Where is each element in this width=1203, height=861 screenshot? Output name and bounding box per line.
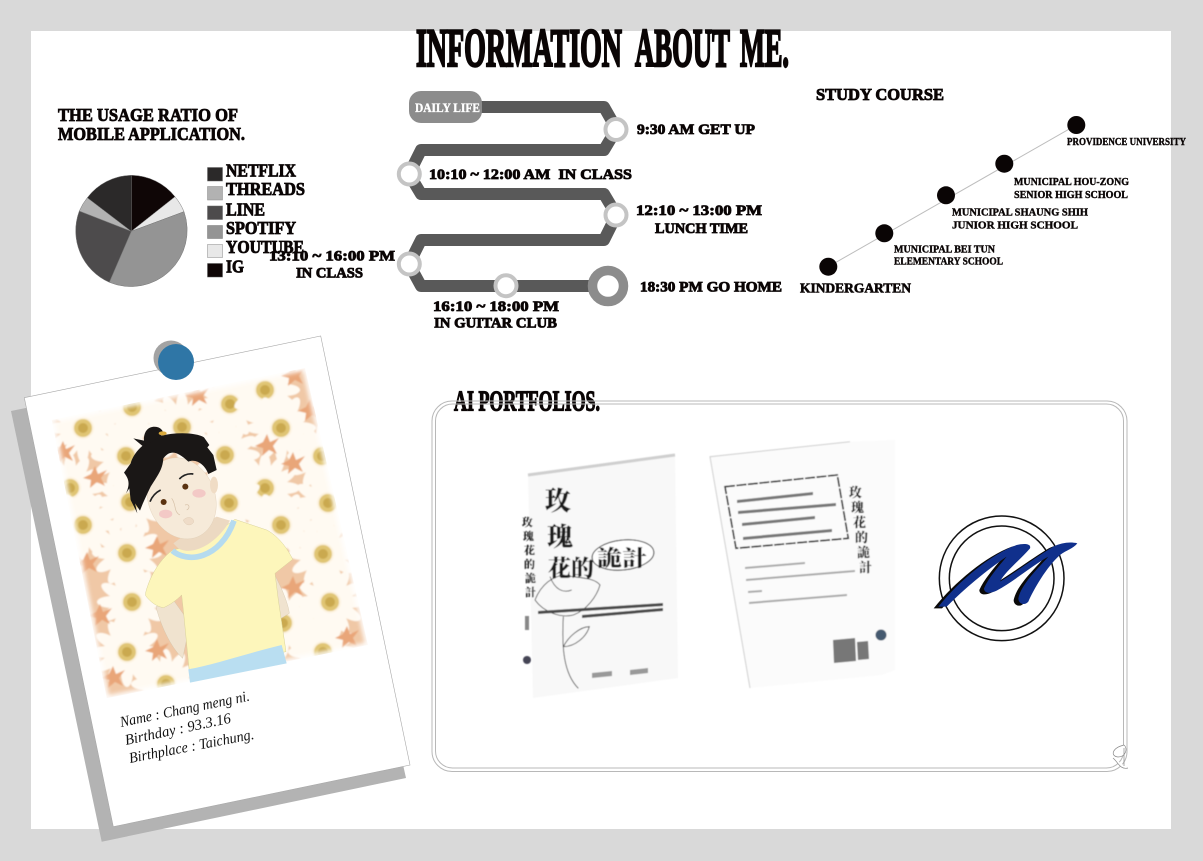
double rounded frame [432,401,1127,772]
timeline track [409,107,616,286]
badge: daily life [409,91,482,123]
card caption [118,689,255,767]
back spine title: 計 [859,557,872,576]
timeline stops [399,119,626,296]
legend: LINE [226,200,265,220]
card caption: Name : Chang meng ni. [118,689,251,731]
spine title: 的 [524,556,535,572]
spine title: 計 [525,584,536,600]
book front cover: 詭計 [597,542,647,573]
heading: study course: STUDY COURSE [816,85,944,104]
timeline labels: IN GUITAR CLUB [434,316,557,332]
pie chart [76,175,187,287]
panel: study course [800,85,1186,296]
heading: usage ratio: THE USAGE RATIO OF [58,105,238,125]
rose line drawing [535,575,600,688]
hair [124,433,217,513]
publisher logo [876,630,886,640]
timeline labels [269,122,782,332]
cover title badge [591,537,655,573]
panel: pinned photo card [11,336,410,842]
back spine title: 的 [855,527,868,546]
arms [156,600,190,658]
book front cover: 瑰 [547,517,574,554]
back cover quote lines [737,492,836,540]
cover blurb [523,603,663,678]
legend: SPOTIFY [226,218,296,238]
M blue stroke [938,543,1077,607]
QR codes [833,638,869,663]
timeline labels: 12:10 ~ 13:00 PM [636,203,762,219]
heading: AI portfolios: AI PORTFOLIOS. [454,386,600,418]
course labels: MUNICIPAL BEI TUN [894,245,995,256]
eyes and brows [161,499,167,505]
text: ME. [740,18,789,78]
course labels: JUNIOR HIGH SCHOOL [952,221,1078,232]
blush [159,510,172,518]
neck [173,517,230,551]
collar [172,521,234,557]
back spine title: 花 [853,512,866,531]
ear [210,477,218,493]
logo: M emblem [934,516,1077,641]
panel: mobile application usage [58,105,305,287]
timeline labels: 18:30 PM GO HOME [640,280,782,296]
book front cover [522,455,678,698]
course labels: KINDERGARTEN [800,281,911,296]
course labels [800,137,1186,296]
spine title: 瑰 [523,528,535,544]
shirt hem [188,645,287,683]
book back cover [710,440,895,688]
timeline labels: LUNCH TIME [655,221,748,237]
timeline labels: 16:10 ~ 18:00 PM [433,299,559,315]
spine title: 詭 [525,570,536,586]
card shadow [11,350,406,842]
back spine title: 瑰 [851,497,865,516]
timeline labels: 13:10 ~ 16:00 PM [269,248,395,264]
back cover body lines [745,562,855,604]
photo background: daisies [52,368,368,698]
timeline labels: IN CLASS [296,266,363,282]
cover title: 玫 [545,481,571,518]
timeline labels: 9:30 AM GET UP [637,122,755,138]
badge: daily life: DAILY LIFE [415,101,480,115]
face [135,447,228,549]
timeline labels: 10:10 ~ 12:00 AM IN CLASS [429,167,632,183]
course labels: MUNICIPAL HOU-ZONG [1014,177,1129,188]
hair bun [133,427,163,447]
frame corner ornament [1113,745,1128,768]
M shadow [934,544,1073,608]
course labels: SENIOR HIGH SCHOOL [1014,190,1128,201]
course stops [819,116,1085,276]
panel: daily life timeline [269,91,782,332]
title: ABOUT [635,18,730,78]
spine title: 花 [524,542,535,558]
legend: IG [226,256,244,276]
course line [828,125,1076,267]
course labels: ELEMENTARY SCHOOL [894,257,1003,268]
card caption: Birthday : 93.3.16 [124,711,233,749]
course labels: PROVIDENCE UNIVERSITY [1067,137,1186,148]
back spine title [849,482,872,576]
portrait illustration [124,427,293,683]
book front cover: 花的 [548,550,594,583]
legend: YOUTUBE [226,237,304,257]
legend: THREADS [226,179,305,199]
legend [208,160,305,277]
end stop: home [592,270,624,302]
card caption: Birthplace : Taichung. [128,727,255,767]
spine title [522,514,536,600]
heading: usage ratio [58,105,245,144]
nose and mouth [172,498,189,515]
shirt [146,519,293,672]
pin [154,340,194,380]
back spine title: 詭 [857,542,870,561]
spine title: 玫 [522,514,533,530]
course labels: MUNICIPAL SHAUNG SHIH [952,208,1088,219]
heading: usage ratio: MOBILE APPLICATION. [58,124,245,144]
back cover quote box [725,475,848,548]
panel: AI portfolios [432,386,1128,772]
card [24,336,410,827]
title: INFORMATION [416,18,622,78]
legend: NETFLIX [226,160,296,180]
back spine title: 玫 [849,482,862,501]
